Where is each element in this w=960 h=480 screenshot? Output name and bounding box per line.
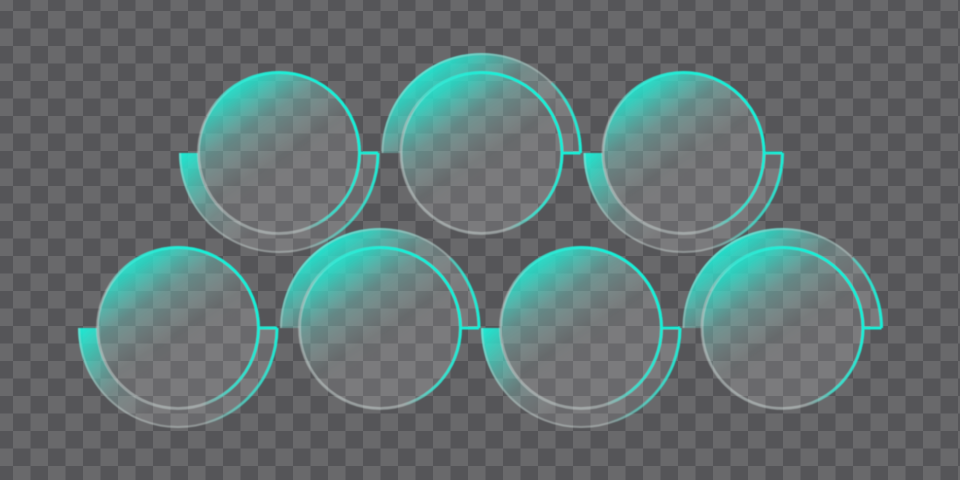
lens 1: top row, lower band	[179, 72, 379, 253]
lens 4: bottom row, lower band	[78, 248, 278, 428]
lens 5: bottom row, upper band	[280, 228, 480, 408]
lens 3: top row, lower band	[584, 72, 784, 253]
lens 7: bottom row, upper band	[682, 228, 882, 408]
lens 2: top row, upper band	[382, 53, 582, 234]
lens 6: bottom row, lower band	[481, 248, 681, 428]
